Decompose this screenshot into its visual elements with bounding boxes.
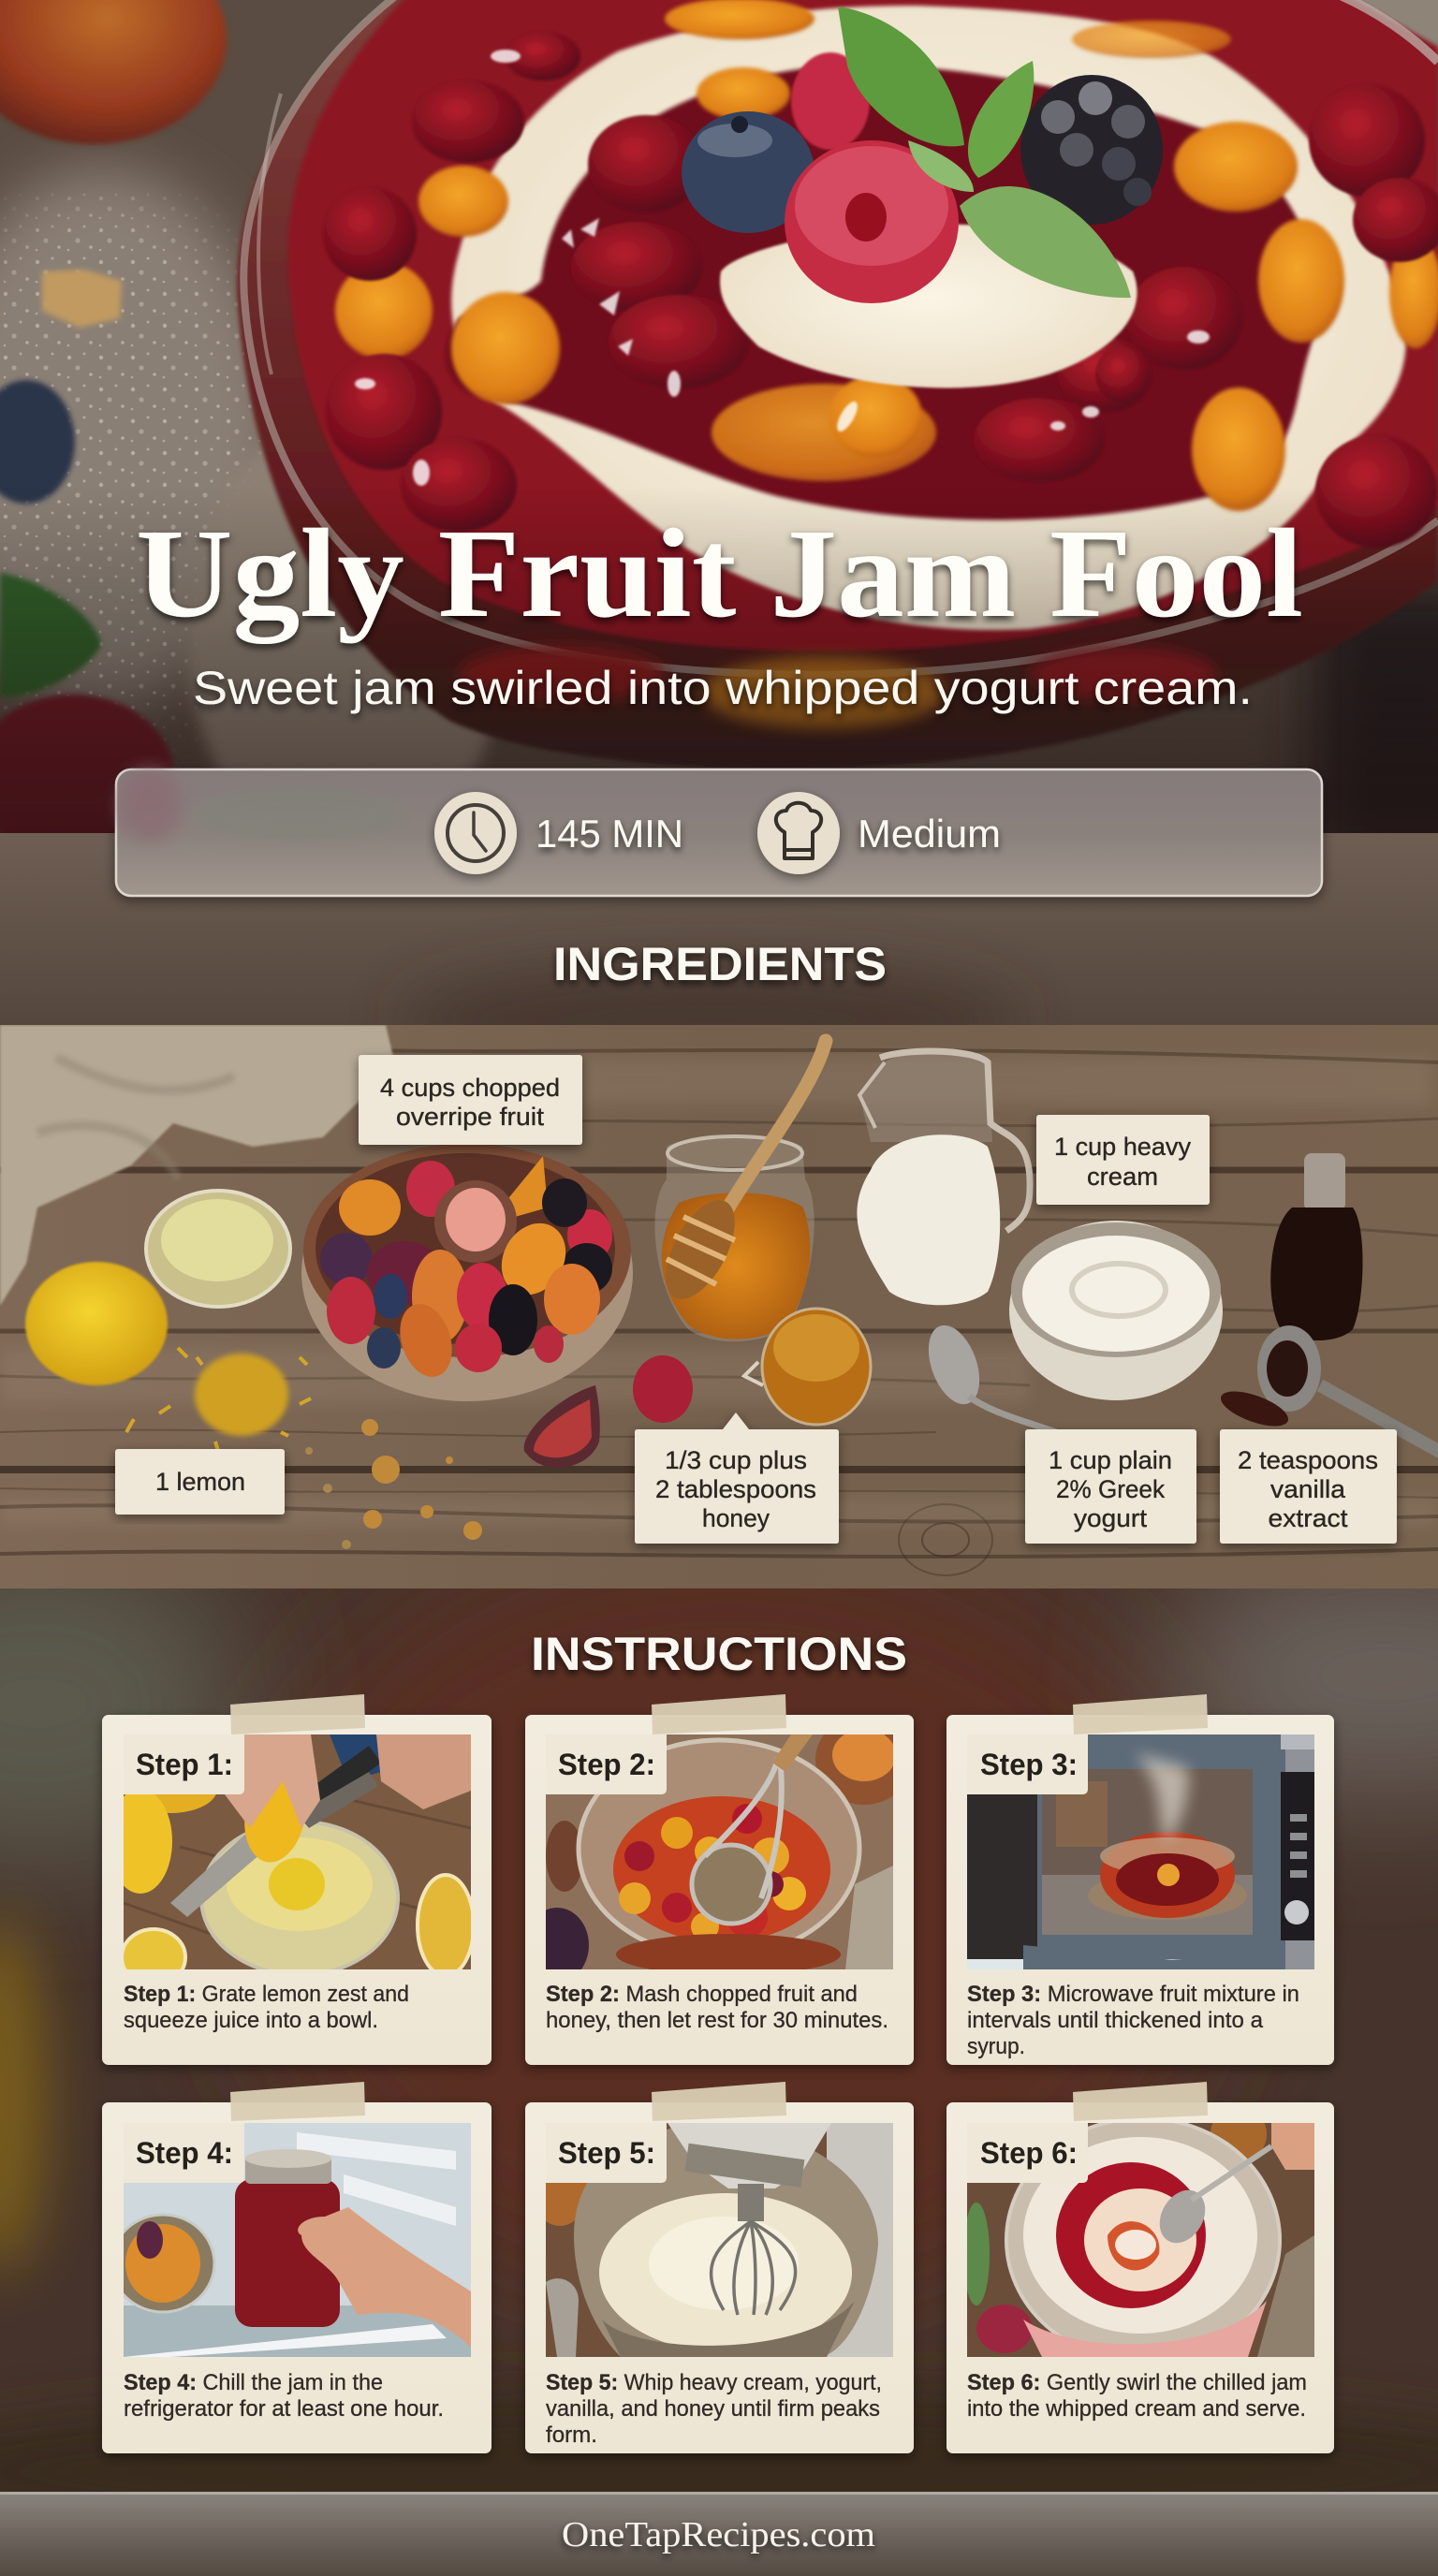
tape [230,1694,365,1734]
caption: Step 6: Gently swirl the chilled jam [967,2370,1307,2395]
lemon [25,1262,168,1385]
heading: instructions: INSTRUCTIONS [531,1628,907,1680]
caption: syrup. [967,2034,1025,2059]
garnish: raspberry [785,140,959,303]
fruit bowl [301,1144,633,1401]
step tag [124,1734,244,1794]
photo: zesting lemon [124,1734,471,1969]
small honey cup [744,1309,871,1425]
label: heavy cream: cream [1087,1163,1158,1191]
glass jug of cream [857,1051,1030,1305]
center cream mound [720,225,1137,388]
label: vanilla: 2 teaspoons [1238,1446,1378,1474]
vanilla bottle [1270,1153,1363,1340]
card: step 4 [102,2082,492,2453]
caption [546,1982,888,2033]
step tag: Step 6: [980,2136,1078,2170]
caption: Step 2: Mash chopped fruit and [546,1982,858,2007]
photo: stand mixer [546,2123,893,2357]
caption [546,2370,882,2448]
subtitle: Sweet jam swirled into whipped yogurt cream. [193,662,1253,714]
caption: form. [546,2422,597,2448]
tape [652,2082,786,2121]
photo: microwave [967,1734,1314,1969]
label: yogurt: 1 cup plain [1049,1446,1172,1474]
step tag: Step 5: [558,2136,655,2170]
peach pieces [335,0,1438,511]
step tag: Step 4: [136,2136,233,2170]
label: heavy cream: 1 cup heavy [1054,1133,1191,1161]
photo: swirling jam [967,2123,1314,2357]
whipped cream swirl [451,6,1406,630]
lemon juice cup [146,1191,290,1307]
glass bowl [237,0,1438,768]
label: yogurt: 2% Greek [1056,1475,1165,1503]
label: honey: 2 tablespoons [655,1475,816,1503]
card: step 6 [946,2082,1334,2453]
step tag [546,2123,667,2183]
background fruit: peach [0,0,227,144]
lemon zest [126,1348,311,1451]
label: honey: 1/3 cup plus [665,1446,807,1474]
caption: vanilla, and honey until firm peaks [546,2396,880,2422]
yogurt bowl [1009,1221,1223,1400]
photo: mashing fruit [546,1734,893,1969]
label: vanilla: vanilla [1270,1475,1346,1503]
card: step 1 [102,1694,492,2065]
label: honey [635,1412,839,1544]
honey jar [654,1136,814,1341]
label: vanilla [1220,1429,1397,1544]
jam highlights [355,50,1210,486]
label: fruit: overripe fruit [396,1103,545,1131]
icon: chef hat [757,792,840,874]
label: lemon [115,1449,285,1515]
card: step 3 [946,1694,1334,2065]
tape [1073,2082,1208,2121]
time text: 145 MIN [536,812,683,856]
tape [652,1694,786,1734]
caption: squeeze juice into a bowl. [124,2008,378,2033]
tape [1073,1694,1208,1734]
jam cherries [323,32,1438,548]
caption [124,2370,444,2422]
difficulty text: Medium [858,812,1001,856]
caption [967,2370,1307,2422]
caption: into the whipped cream and serve. [967,2396,1306,2422]
caption [967,1982,1299,2059]
honey dipper [652,1041,826,1310]
measuring spoon [1217,1325,1438,1453]
heading: ingredients: INGREDIENTS [553,938,887,990]
card: step 2 [525,1694,914,2065]
background raspberry [0,695,174,859]
step tag: Step 1: [136,1748,233,1781]
garnish: mint leaves [838,7,1131,298]
caption: honey, then let rest for 30 minutes. [546,2008,888,2033]
garnish: back raspberry [791,52,870,150]
card: step 5 [525,2082,914,2453]
caption: Step 4: Chill the jam in the [124,2370,383,2395]
garnish: blackberry [1020,75,1163,225]
garnish: blueberry [682,111,814,233]
title: Ugly Fruit Jam Fool [136,504,1303,644]
caption: refrigerator for at least one hour. [124,2396,444,2422]
caption: Step 1: Grate lemon zest and [124,1982,409,2007]
step tag [546,1734,667,1794]
hero photo: jam fool in a glass bowl [0,0,1438,861]
caption [124,1982,409,2033]
caption: Step 5: Whip heavy cream, yogurt, [546,2370,882,2395]
label: yogurt: yogurt [1074,1504,1148,1532]
background fruit: blueberry [0,380,75,504]
step tag: Step 3: [980,1748,1078,1781]
label: heavy cream [1036,1115,1210,1205]
info bar [116,768,1322,896]
jam ring [446,66,1317,520]
hero bottom shade [0,487,1438,833]
step tag [124,2123,244,2183]
background mint leaf [0,573,101,697]
caption: Step 3: Microwave fruit mixture in [967,1982,1299,2007]
linen cloth [0,1025,398,1306]
label: honey: honey [702,1504,770,1532]
raspberry [633,1355,693,1423]
icon: clock [434,792,517,874]
label: fruit: 4 cups chopped [380,1074,560,1102]
photo: jam jar in fridge [124,2123,471,2357]
label: lemon: 1 lemon [155,1468,245,1496]
ingredients photo panel [0,1025,1438,1588]
crumbs [305,1419,482,1549]
step tag: Step 2: [558,1748,655,1781]
caption: intervals until thickened into a [967,2008,1263,2033]
step tag [967,2123,1088,2183]
label: fruit [359,1055,582,1145]
label: yogurt [1025,1429,1196,1544]
fig half [524,1385,600,1468]
footer bar [0,2492,1438,2576]
spoon [918,1318,1056,1432]
step tag [967,1734,1088,1794]
label: vanilla: extract [1268,1504,1348,1532]
tape [230,2082,365,2121]
footer text: OneTapRecipes.com [562,2515,875,2554]
